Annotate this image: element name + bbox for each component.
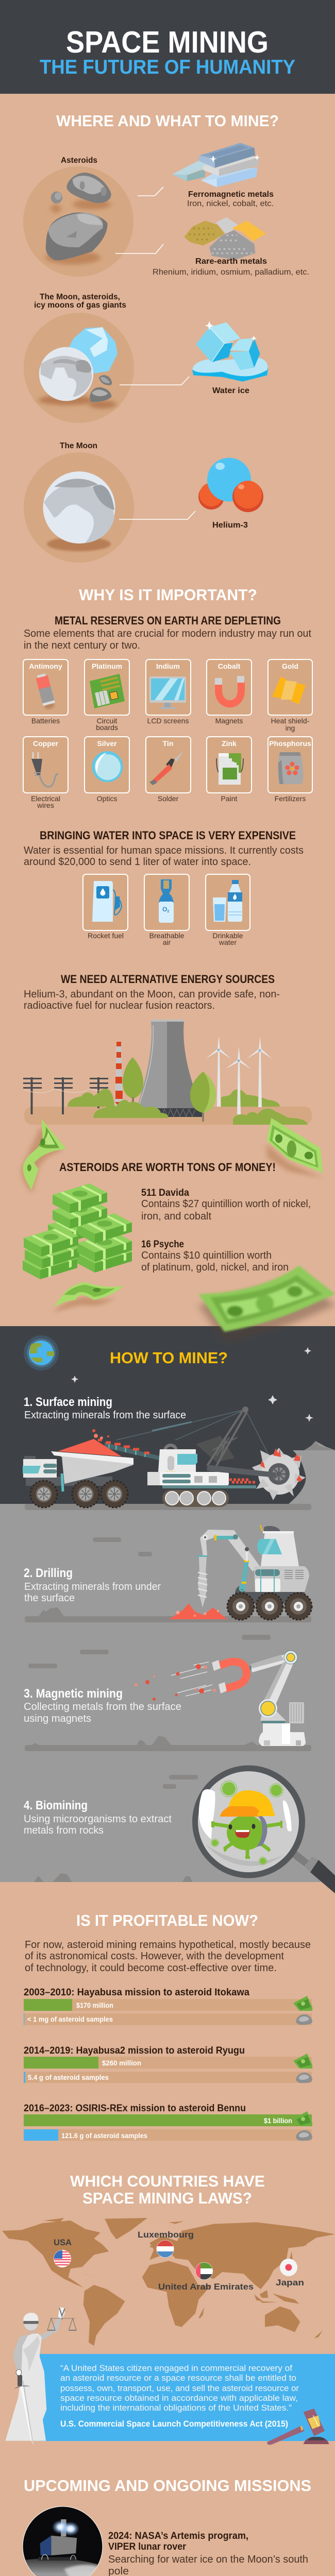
text block: 16 Psyche: [141, 1239, 289, 1273]
chart: OSIRIS-REx: 2016–2023: OSIRIS-REx mission to asteroid Bennu: [24, 2103, 246, 2114]
icon: lady justice: [5, 2307, 76, 2446]
card: breathable air: Breathable: [149, 931, 185, 940]
text block: 511 Davida: 511 Davida: [141, 1188, 189, 1198]
text block: metal reserves: Some elements that are crucial for modern industry may run out: [24, 628, 311, 639]
text block: alternative energy: Helium-3, abundant on the Moon, can provide safe, non-: [24, 989, 280, 1000]
icon: stack of cash: [23, 1183, 132, 1279]
mission: VIPER: [21, 2504, 308, 2576]
text: VIPER: [108, 2530, 308, 2576]
chart: OSIRIS-REx: $1 billion: [264, 2116, 292, 2125]
card: indium: [146, 659, 191, 725]
card: platinum: Platinum: [92, 662, 122, 670]
panel: law quote: [39, 2354, 335, 2441]
magnet: [212, 1660, 252, 1693]
icon: flying bill left: [22, 1119, 66, 1194]
chart: Hayabusa: < 1 mg of asteroid samples: [27, 2015, 113, 2023]
connector line: [115, 244, 163, 253]
country: Japan: [276, 2259, 304, 2287]
conveyor and cables: [92, 1410, 274, 1465]
card: copper: [23, 737, 68, 809]
text block: bringing water: [24, 845, 304, 868]
card: zinc: [207, 737, 252, 803]
card: phosphorus: Phosphorus: [269, 739, 311, 748]
label: ferromagnetic metals: [187, 190, 274, 208]
card: phosphorus: [268, 737, 312, 803]
chart: Hayabusa2: $260 million: [102, 2059, 141, 2067]
text block: surface mining: 1. Surface mining: [24, 1395, 112, 1409]
text block: 511 Davida: [141, 1188, 311, 1222]
photo: VIPER rover: [21, 2504, 106, 2576]
card: silver: Silver: [97, 739, 117, 748]
text block: 16 Psyche: of platinum, gold, nickel, and iron: [141, 1262, 289, 1273]
card: cobalt: [207, 659, 252, 725]
card: antimony: Antimony: [29, 662, 62, 670]
panel: law quote: possess, own, transport, use, and sell the asteroid resource or: [60, 2384, 299, 2393]
country: Japan: Japan: [276, 2278, 304, 2287]
card: antimony: Batteries: [31, 717, 60, 725]
card: zinc: Paint: [221, 794, 238, 803]
chart: OSIRIS-REx: [24, 2103, 312, 2141]
icon: helium-3 atom: [198, 457, 263, 512]
illustration: magnetic robot arm: [135, 1651, 306, 1746]
label: helium-3: Helium-3: [212, 521, 248, 530]
text block: profitability: of technology, it could become cost-effective over time.: [25, 1962, 277, 1974]
card: gold: ing: [286, 724, 295, 732]
illustration: drilling machine: [169, 1525, 312, 1620]
country: Luxembourg: Luxembourg: [138, 2230, 194, 2240]
label: rare-earth metals: Rare-earth metals: [195, 257, 267, 266]
chimney: [115, 1042, 123, 1107]
card: tin: Solder: [158, 794, 179, 803]
chart: Hayabusa: [24, 1987, 312, 2025]
subtitle: THE FUTURE OF HUMANITY: [40, 56, 295, 78]
bacterium miner: [211, 1790, 282, 1859]
text block: magnetic mining: using magnets: [24, 1713, 91, 1724]
card: tin: Tin: [163, 739, 173, 748]
country: USA: [54, 2238, 72, 2267]
card: silver: [85, 737, 129, 803]
dark section: how to mine: [0, 1326, 335, 1504]
card: indium: LCD screens: [147, 717, 189, 725]
card: copper: Electrical: [31, 794, 60, 803]
text block: 511 Davida: Contains $27 quintillion worth of nickel,: [141, 1198, 311, 1210]
panel: moon, asteroids, icy moons: icy moons of gas giants: [34, 301, 126, 310]
heading: where and what to mine: WHERE AND WHAT TO MINE?: [56, 112, 279, 130]
card: drinkable water: Drinkable: [212, 931, 243, 940]
card: platinum: [85, 659, 129, 732]
text block: bringing water: around $20,000 to send 1 liter of water into space.: [24, 856, 251, 868]
country: Luxembourg: [138, 2230, 194, 2258]
title: SPACE MINING: [66, 25, 269, 59]
heading: which countries: WHICH COUNTRIES HAVE: [70, 2172, 265, 2190]
text block: magnetic mining: 3. Magnetic mining: [24, 1687, 123, 1701]
card: antimony: [23, 659, 68, 725]
text: VIPER: Searching for water ice on the Moon’s south: [108, 2554, 308, 2565]
text block: profitability: [25, 1939, 311, 1974]
card: breathable air: [144, 874, 189, 946]
text block: metal reserves: [24, 628, 311, 651]
heading: which countries: [70, 2172, 265, 2207]
connector line: [120, 377, 189, 385]
connector line: [119, 511, 195, 519]
card: breathable air: 2: [167, 910, 169, 913]
panel: moon, asteroids, icy moons: [24, 293, 134, 423]
world map: [2, 2218, 335, 2346]
icon: earth: [24, 1335, 59, 1370]
chart: Hayabusa2: [24, 2045, 312, 2083]
label: rare-earth metals: Rhenium, iridium, osmium, palladium, etc.: [153, 268, 309, 277]
icon: metal ingots: [172, 143, 260, 187]
card: copper: wires: [37, 801, 54, 809]
text block: profitability: of its astronomical costs. However, with the development: [25, 1951, 284, 1962]
illustration: energy plant: [23, 1020, 312, 1125]
icon: moon with ice and rocks: [39, 327, 118, 409]
text block: bringing water: Water is essential for human space missions. It currently costs: [24, 845, 304, 856]
magnifier handle: [288, 1849, 335, 1893]
stars: [71, 1347, 313, 1422]
icon: moon: [43, 471, 115, 544]
heading: is it profitable: IS IT PROFITABLE NOW?: [76, 1911, 258, 1929]
hauler truck: [23, 1439, 133, 1507]
icon: rare-earth pile: [184, 217, 266, 260]
tree: [190, 1072, 216, 1122]
card: gold: Gold: [282, 662, 298, 670]
chart: Hayabusa: $170 million: [76, 2001, 113, 2009]
robot arm: [249, 1651, 306, 1746]
card: breathable air: air: [163, 938, 171, 946]
text block: biomining: [24, 1799, 172, 1836]
card: zinc: Zink: [222, 739, 237, 748]
text block: metal reserves: in the next century or two.: [24, 640, 140, 651]
card: drinkable water: water: [219, 938, 237, 946]
card: cobalt: Cobalt: [218, 662, 241, 670]
chart: Hayabusa2: 2014–2019: Hayabusa2 mission to asteroid Ryugu: [24, 2045, 245, 2056]
panel: moon, asteroids, icy moons: The Moon, asteroids,: [40, 293, 120, 301]
text block: drilling: Extracting minerals from under: [24, 1581, 161, 1592]
panel: the moon: The Moon: [60, 442, 97, 450]
text block: biomining: Using microorganisms to extract: [24, 1814, 172, 1825]
text block: surface mining: [24, 1395, 186, 1421]
illustration: magnifier with bacteria: [192, 1765, 335, 1893]
label: ferromagnetic metals: Ferromagnetic metals: [188, 190, 274, 199]
excavator: [147, 1406, 256, 1507]
card: platinum: boards: [96, 723, 118, 732]
text block: drilling: 2. Drilling: [24, 1566, 73, 1580]
icon: asteroid rocks: [45, 173, 111, 264]
header band: [0, 0, 335, 94]
card: cobalt: Magnets: [215, 717, 243, 725]
card: copper: Copper: [33, 739, 59, 748]
text block: magnetic mining: [24, 1687, 181, 1724]
panel: the moon: [24, 442, 134, 563]
heading: how to mine: HOW TO MINE?: [110, 1349, 228, 1367]
panel: law quote: an asteroid resource or a space resource shall be entitled to: [60, 2374, 296, 2383]
icon: large blurred bill: [199, 1266, 335, 1343]
text block: surface mining: Extracting minerals from the surface: [24, 1410, 186, 1421]
text block: alternative energy: radioactive fuel for nuclear fusion reactors.: [24, 1000, 215, 1011]
text: VIPER: 2024: NASA’s Artemis program,: [108, 2530, 248, 2541]
text block: drilling: [24, 1566, 161, 1604]
card: drinkable water: [206, 874, 250, 946]
card: tin: [146, 737, 191, 803]
text block: biomining: metals from rocks: [24, 1825, 104, 1836]
chart: OSIRIS-REx: 121.6 g of asteroid samples: [61, 2131, 147, 2140]
subheading: metal reserves: METAL RESERVES ON EARTH ARE DEPLETING: [55, 614, 281, 627]
panel: law quote: including the international obligations of the United States.”: [60, 2403, 292, 2413]
heading: upcoming missions: UPCOMING AND ONGOING MISSIONS: [24, 2477, 311, 2495]
icon: flying bill right: [266, 1118, 323, 1178]
panel: law quote: “A United States citizen engaged in commercial recovery of: [60, 2364, 292, 2373]
heading: which countries: SPACE MINING LAWS?: [82, 2189, 252, 2207]
card: rocket fuel: Rocket fuel: [88, 931, 124, 940]
heading: why is it important: WHY IS IT IMPORTANT?: [79, 586, 257, 604]
card: gold: Heat shield-: [271, 717, 310, 725]
country: USA: USA: [54, 2238, 72, 2247]
connector line: [138, 187, 163, 196]
country: UAE: [158, 2262, 254, 2292]
label: rare-earth metals: [153, 257, 309, 277]
icon: water ice: [192, 321, 268, 382]
subheading: asteroids worth money: ASTEROIDS ARE WORTH TONS OF MONEY!: [59, 1161, 276, 1174]
subheading: alternative energy: WE NEED ALTERNATIVE ENERGY SOURCES: [61, 973, 275, 986]
wind turbines: [206, 1036, 272, 1114]
text: VIPER: VIPER lunar rover: [108, 2541, 186, 2552]
text block: 16 Psyche: Contains $10 quintillion worth: [141, 1250, 272, 1261]
country: UAE: United Arab Emirates: [158, 2282, 254, 2292]
card: platinum: Circuit: [97, 717, 117, 725]
cooling tower: [137, 1020, 203, 1117]
small bacteria: [211, 1781, 283, 1865]
text block: profitability: For now, asteroid mining remains hypothetical, mostly because: [25, 1939, 311, 1951]
label: ferromagnetic metals: Iron, nickel, cobalt, etc.: [187, 199, 274, 208]
icon: gavel: [267, 2409, 329, 2445]
panel: asteroids: [23, 156, 133, 277]
panel: law quote: space resource obtained in accordance with applicable law,: [60, 2394, 298, 2403]
card: breathable air: O: [162, 906, 167, 913]
chart: Hayabusa2: 5.4 g of asteroid samples: [28, 2073, 109, 2081]
text block: alternative energy: [24, 989, 280, 1011]
subheading: bringing water: BRINGING WATER INTO SPACE IS VERY EXPENSIVE: [40, 829, 296, 842]
card: rocket fuel: [83, 874, 128, 940]
text block: drilling: the surface: [24, 1592, 75, 1604]
text block: biomining: 4. Biomining: [24, 1799, 88, 1812]
illustration: surface mining machines: [23, 1406, 306, 1507]
panel: asteroids: Asteroids: [61, 156, 97, 165]
card: phosphorus: Fertilizers: [275, 794, 306, 803]
metal particles: [135, 1662, 216, 1701]
chart: Hayabusa: 2003–2010: Hayabusa mission to asteroid Itokawa: [24, 1987, 249, 1998]
icon: small flying bill: [54, 1282, 124, 1312]
label: water ice: Water ice: [212, 386, 249, 395]
act citation: U.S. Commercial Space Launch Competitiveness Act (2015): [60, 2419, 288, 2429]
card: gold: [268, 659, 312, 732]
bucket wheel: [207, 1448, 306, 1500]
text block: magnetic mining: Collecting metals from the surface: [24, 1701, 181, 1713]
text block: 16 Psyche: 16 Psyche: [141, 1239, 184, 1250]
card: indium: Indium: [156, 662, 180, 670]
power poles: [23, 1077, 108, 1114]
gray section: lunar surface: [0, 1441, 335, 1882]
text block: 511 Davida: iron, and cobalt: [141, 1211, 211, 1222]
card: silver: Optics: [97, 794, 117, 803]
